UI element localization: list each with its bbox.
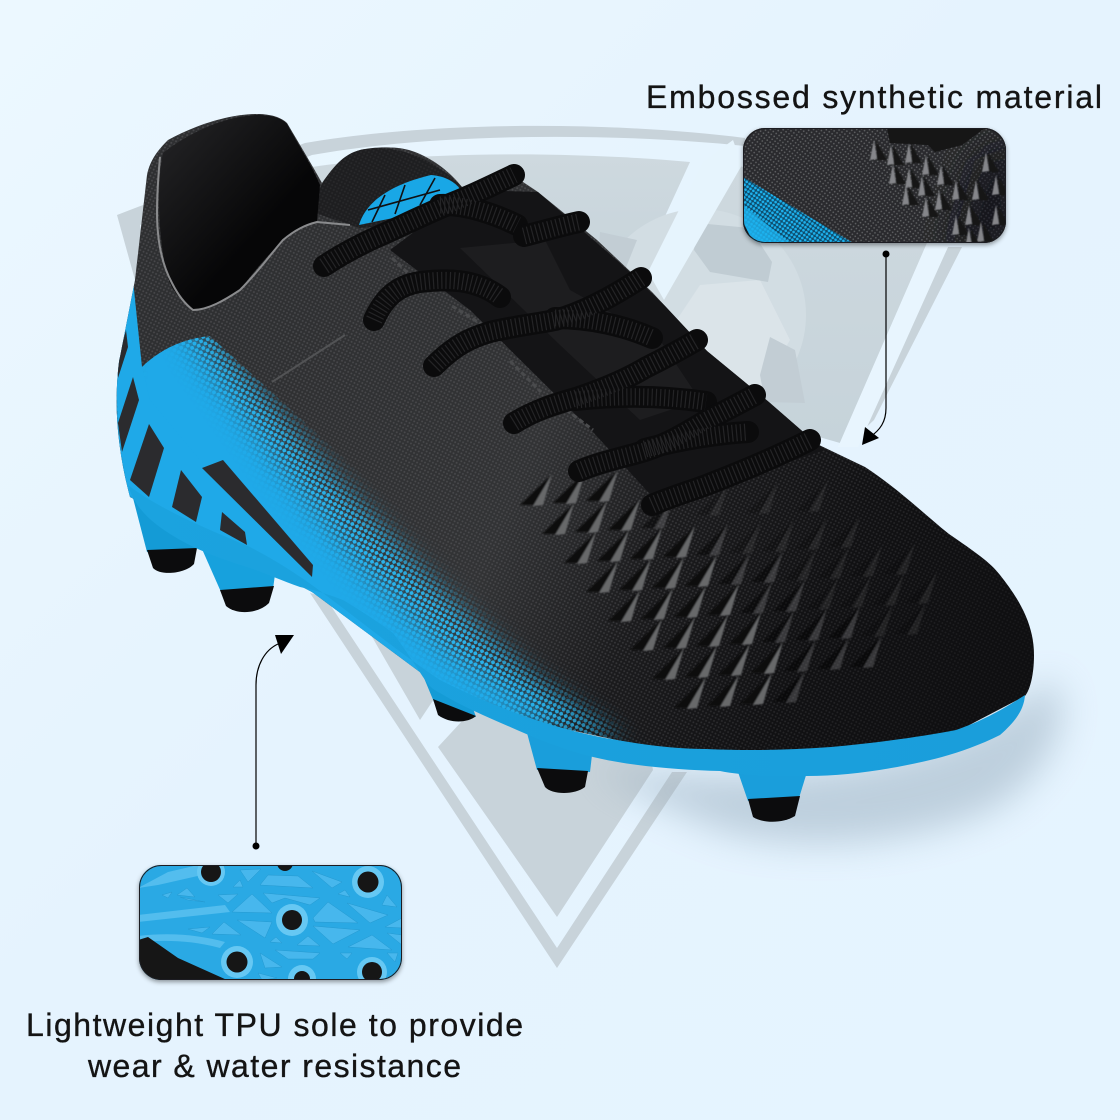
embossed diamond pattern: faint toe rows (696, 480, 937, 637)
sole ridges (138, 865, 230, 948)
boot (100, 100, 1050, 822)
caption: sole: Lightweight TPU sole to provide (26, 1007, 523, 1043)
arrow: material to upper (862, 250, 890, 445)
tongue logo cracks (368, 178, 440, 222)
heading: embossed material: Embossed synthetic material (646, 79, 1102, 115)
boot shadow (590, 680, 1061, 843)
collar trim (157, 157, 350, 310)
tread facets (162, 869, 402, 980)
emblem: white diagonal strip (648, 140, 742, 300)
tongue shade (312, 148, 462, 228)
emblem: lower outer V (310, 593, 687, 968)
emblem: upper gray panel (312, 154, 690, 290)
embossed diamond pattern (520, 470, 937, 709)
collar lining (159, 115, 320, 310)
tongue panel (460, 240, 700, 420)
laces (324, 175, 810, 505)
emblem: outer left chevron and arc (117, 126, 745, 280)
callout: bottom left (26, 635, 523, 1084)
arrow: sole to cleats (252, 635, 294, 850)
eyestay dark area (390, 190, 825, 505)
tongue logo (359, 175, 460, 225)
emblem: shield logo behind the boot (117, 126, 962, 968)
caption: sole: wear & water resistance (87, 1048, 461, 1084)
cleat studs (197, 866, 387, 980)
caption: sole (26, 1007, 523, 1084)
sole (128, 485, 1025, 776)
emblem: lower left inner shard (345, 590, 440, 720)
upper texture and panels (100, 100, 1050, 780)
embossed diamond pattern: bright rows (520, 470, 783, 709)
emblem: soccer ball (594, 209, 806, 421)
emblem: right gray panel (650, 165, 927, 443)
emblem: lower inner V (438, 680, 653, 917)
emblem: right white strip (838, 243, 948, 447)
upper (117, 114, 1034, 752)
seam line (272, 335, 345, 382)
callout: top right (646, 79, 1102, 445)
photo card: material close-up (743, 128, 1020, 250)
embossed diamond pattern: mid rows (641, 497, 882, 703)
heel black stripes (117, 330, 313, 577)
heel blue panel and halftone fade (116, 286, 630, 742)
stitched seam (392, 258, 593, 430)
photo card: sole close-up (136, 864, 405, 985)
cleats (133, 498, 807, 822)
emblem: right gray stripe (858, 247, 962, 435)
